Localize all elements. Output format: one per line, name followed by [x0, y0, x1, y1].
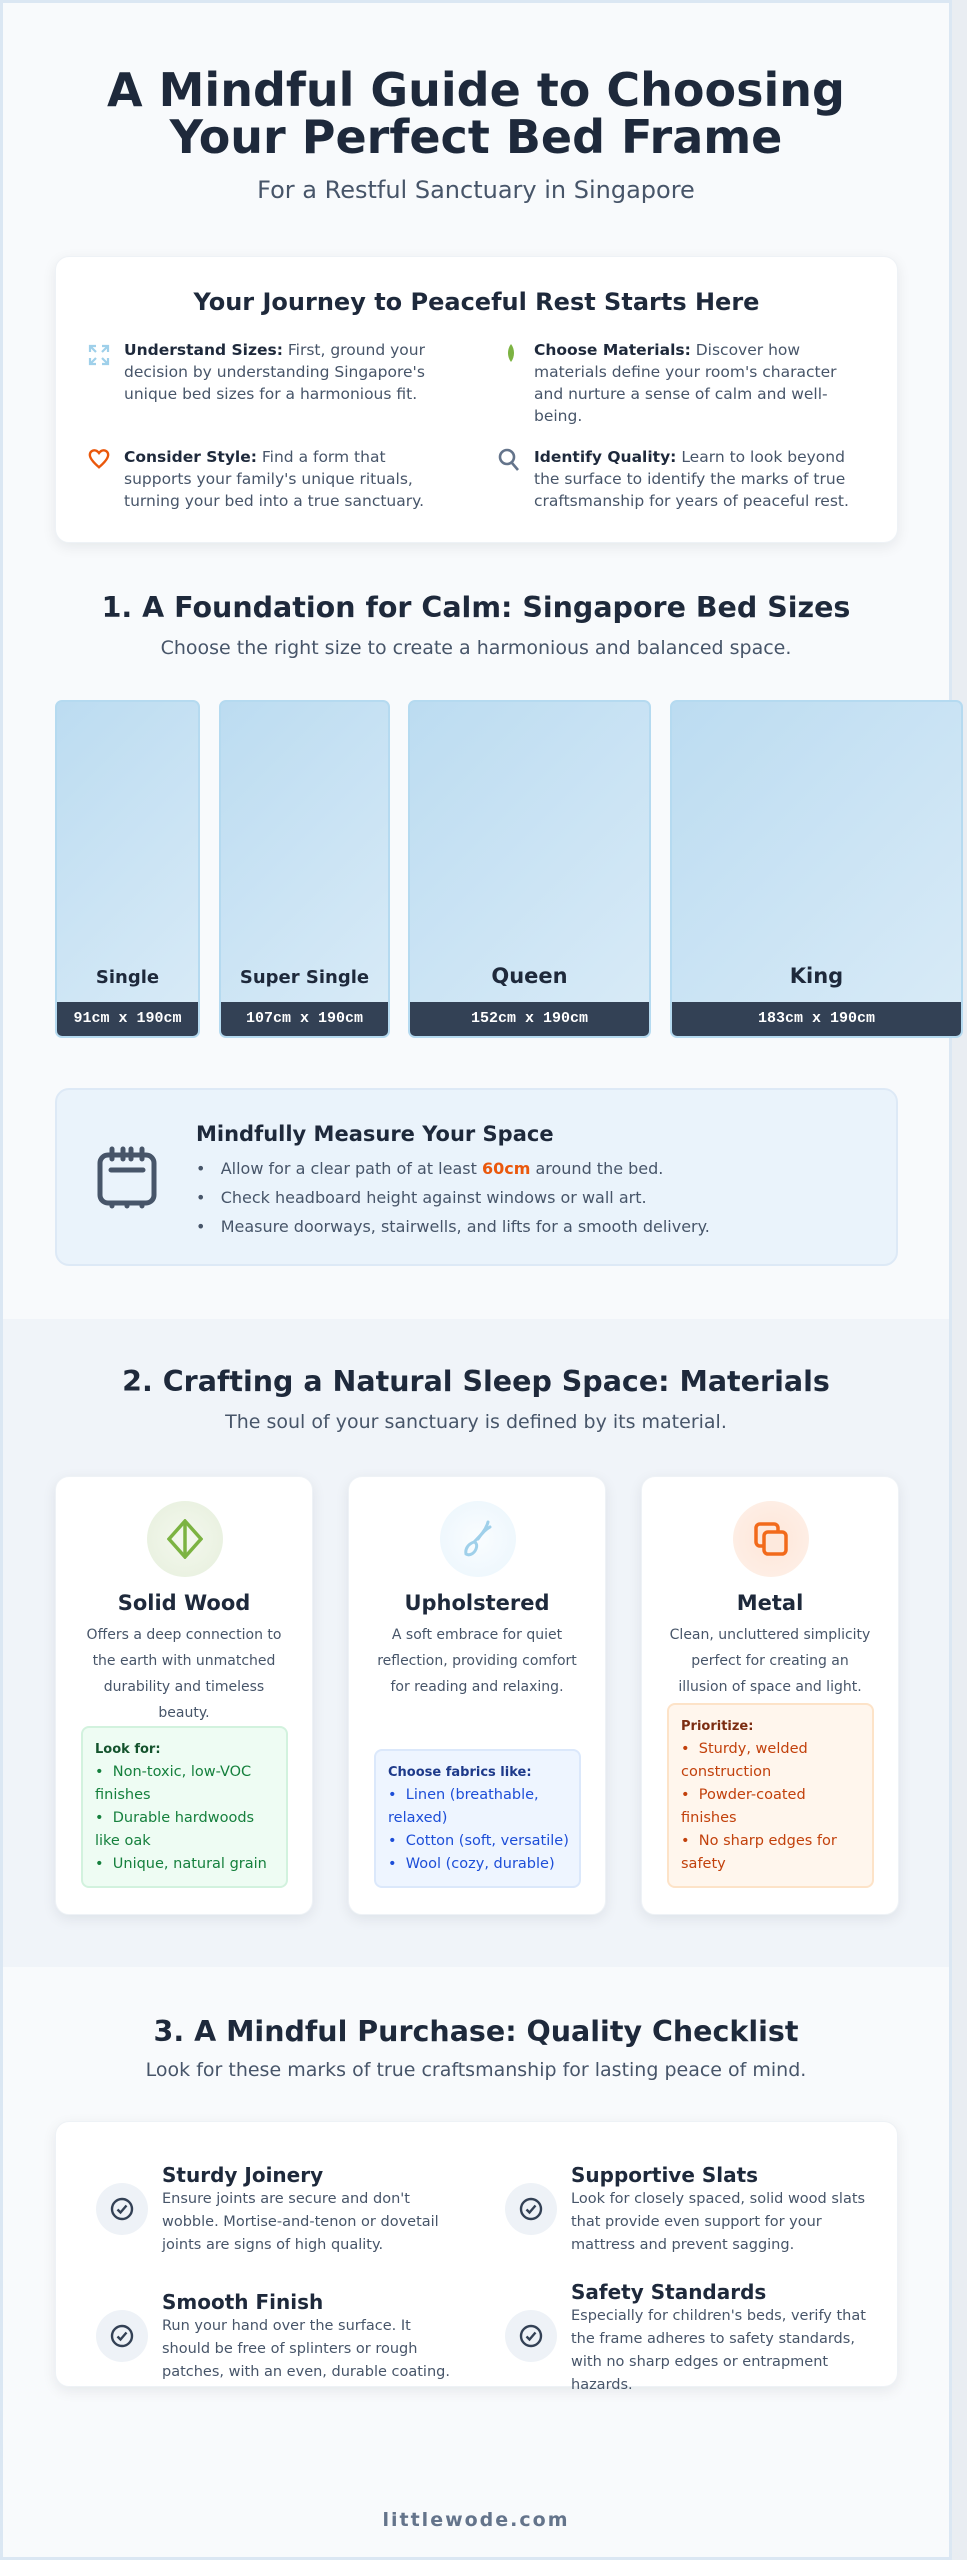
- panel: solid wood: Solid Wood: [118, 1591, 250, 1615]
- prioritize box: • Sturdy, welded construction: [681, 1741, 808, 1780]
- bed: queen: [408, 700, 651, 1038]
- icon: feather: [440, 1501, 516, 1577]
- item: identify quality: Identify Quality: Learn to look beyond the surface to identify the marks of true craftsmanship for years of peaceful rest.: [534, 448, 849, 510]
- section 1 heading: 1. A Foundation for Calm: Singapore Bed Sizes: [102, 591, 850, 624]
- icon: wood diamond: [147, 1501, 223, 1577]
- icon: heart: [88, 449, 110, 469]
- item: supportive slats: [505, 2163, 865, 2253]
- look for box: • Durable hardwoods like oak: [95, 1810, 254, 1849]
- icon: check: [505, 2310, 557, 2362]
- item: choose materials: Choose Materials: Discover how materials define your room's character and nurture a sense of calm and well-being.: [534, 341, 836, 425]
- section 2 heading: 2. Crafting a Natural Sleep Space: Materials: [122, 1365, 830, 1398]
- callout: measure your space: [55, 1088, 898, 1266]
- bed: queen: Queen: [491, 964, 568, 988]
- panel: upholstered: Upholstered: [404, 1591, 550, 1615]
- bed: king: [670, 700, 963, 1038]
- icon: check: [505, 2183, 557, 2235]
- look for box: [81, 1726, 288, 1888]
- prioritize box: • No sharp edges for safety: [681, 1833, 837, 1872]
- icon: check: [96, 2183, 148, 2235]
- section 1 subtitle: Choose the right size to create a harmonious and balanced space.: [161, 637, 791, 659]
- look for box: • Non-toxic, low-VOC finishes: [95, 1764, 251, 1803]
- callout bullets: • Measure doorways, stairwells, and lifts for a smooth delivery.: [196, 1217, 710, 1236]
- panel: metal: Clean, uncluttered simplicity perfect for creating an illusion of space and light.: [670, 1627, 870, 1695]
- item: safety standards: Safety Standards: [571, 2280, 766, 2304]
- panel: quality checklist: [55, 2121, 898, 2387]
- callout bullets: • Allow for a clear path of at least 60cm around the bed.: [196, 1159, 663, 1178]
- item: smooth finish: [96, 2290, 450, 2380]
- bed: single: 91cm x 190cm: [73, 1010, 182, 1027]
- icon: copy squares: [733, 1501, 809, 1577]
- panel: metal: Metal: [737, 1591, 803, 1615]
- panel: upholstered: A soft embrace for quiet reflection, providing comfort for reading and relaxing.: [377, 1627, 577, 1695]
- title: [107, 63, 845, 164]
- section 3 subtitle: Look for these marks of true craftsmanship for lasting peace of mind.: [146, 2059, 806, 2081]
- bed: super single: Super Single: [240, 967, 369, 988]
- icon: calendar: [98, 1146, 156, 1208]
- prioritize box: • Powder-coated finishes: [681, 1787, 806, 1826]
- item: sturdy joinery: Ensure joints are secure and don't wobble. Mortise-and-tenon or dovetail joints are signs of high quality.: [162, 2191, 439, 2253]
- icon: magnifier: [498, 448, 519, 471]
- callout bullets: • Check headboard height against windows or wall art.: [196, 1188, 647, 1207]
- look for box: • Unique, natural grain: [95, 1856, 267, 1872]
- subtitle: For a Restful Sanctuary in Singapore: [257, 176, 695, 204]
- item: sturdy joinery: [96, 2163, 439, 2253]
- fabrics box: • Linen (breathable, relaxed): [388, 1787, 539, 1826]
- section 2 band: [3, 1319, 949, 1967]
- bed: single: [55, 700, 200, 1038]
- item: safety standards: [505, 2280, 866, 2393]
- fabrics box: • Cotton (soft, versatile): [388, 1833, 569, 1849]
- icon: leaf: [508, 344, 514, 362]
- intro heading: Your Journey to Peaceful Rest Starts Here: [194, 288, 759, 316]
- title: Your Perfect Bed Frame: [170, 110, 782, 164]
- fabrics box: [374, 1749, 581, 1888]
- bed: king: 183cm x 190cm: [758, 1010, 875, 1027]
- prioritize box: [667, 1703, 874, 1888]
- panel: journey intro: [55, 256, 898, 543]
- prioritize box: Prioritize:: [681, 1719, 753, 1734]
- icon: expand arrows: [88, 344, 110, 366]
- item: smooth finish: Smooth Finish: [162, 2290, 323, 2314]
- item: sturdy joinery: Sturdy Joinery: [162, 2163, 323, 2187]
- item: smooth finish: Run your hand over the surface. It should be free of splinters or rough patches, with an even, durable coating.: [162, 2318, 450, 2380]
- callout heading: Mindfully Measure Your Space: [196, 1122, 554, 1146]
- bed: single: Single: [96, 967, 159, 988]
- item: supportive slats: Look for closely spaced, solid wood slats that provide even support for your mattress and prevent sagging.: [571, 2191, 865, 2253]
- section 2 subtitle: The soul of your sanctuary is defined by its material.: [225, 1411, 727, 1433]
- bed: super single: 107cm x 190cm: [246, 1010, 363, 1027]
- panel: metal: [641, 1476, 899, 1915]
- bed: king: King: [790, 964, 843, 988]
- callout bullets: [196, 1159, 710, 1236]
- panel: solid wood: Offers a deep connection to the earth with unmatched durability and timeless beauty.: [87, 1627, 281, 1721]
- section 3 heading: 3. A Mindful Purchase: Quality Checklist: [154, 2015, 798, 2048]
- title: A Mindful Guide to Choosing: [107, 63, 845, 117]
- item: understand sizes: Understand Sizes: First, ground your decision by understanding Singapore's unique bed sizes for a harmonious fit.: [124, 341, 425, 403]
- fabrics box: Choose fabrics like:: [388, 1765, 532, 1780]
- item: supportive slats: Supportive Slats: [571, 2163, 758, 2187]
- panel: upholstered: [348, 1476, 606, 1915]
- item: safety standards: Especially for children's beds, verify that the frame adheres to safety standards, with no sharp edges or entrapment hazards.: [571, 2308, 866, 2393]
- item: consider style: Consider Style: Find a form that supports your family's unique rituals, turning your bed into a true sanctuary.: [124, 448, 424, 510]
- panel: solid wood: [55, 1476, 313, 1915]
- bed: super single: [219, 700, 390, 1038]
- footer: littlewode.com: [382, 2509, 570, 2531]
- fabrics box: • Wool (cozy, durable): [388, 1856, 555, 1872]
- bed: queen: 152cm x 190cm: [471, 1010, 588, 1027]
- icon: check: [96, 2310, 148, 2362]
- look for box: Look for:: [95, 1742, 161, 1757]
